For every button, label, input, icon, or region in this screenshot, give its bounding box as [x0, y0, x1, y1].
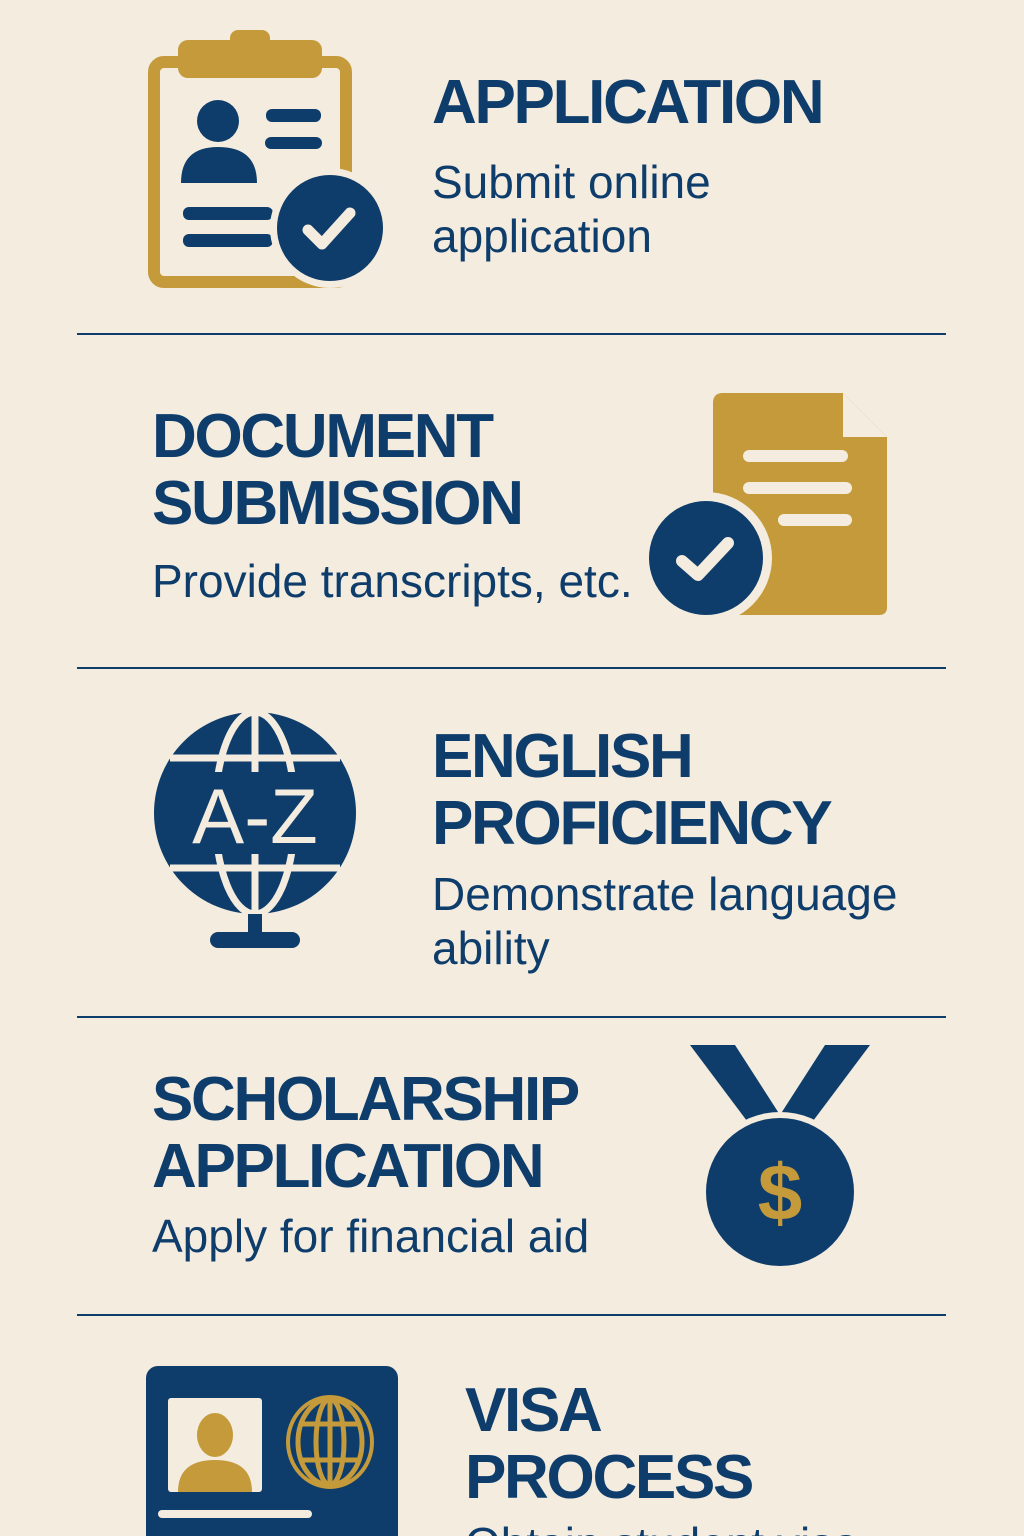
icon: globe A-Z: A-Z [192, 772, 318, 860]
title: scholarship application: SCHOLARSHIP [152, 1065, 578, 1134]
title: visa process: VISA [465, 1376, 601, 1445]
icon: visa card [146, 1366, 398, 1536]
text: document submission: Provide transcripts, etc. [152, 555, 633, 607]
text: scholarship application: Apply for financial aid [152, 1210, 589, 1262]
title: scholarship application [152, 1065, 578, 1201]
icon: globe A-Z [154, 712, 356, 948]
title: english proficiency: PROFICIENCY [432, 789, 830, 858]
text: application [432, 156, 711, 262]
text: english proficiency [432, 868, 897, 974]
text: english proficiency: Demonstrate language [432, 868, 897, 920]
title: scholarship application: APPLICATION [152, 1132, 542, 1201]
icon: clipboard application [148, 30, 383, 288]
title: document submission [152, 402, 522, 538]
title: english proficiency: ENGLISH [432, 722, 691, 791]
title: english proficiency [432, 722, 832, 858]
icon: medal with dollar: $ [758, 1148, 802, 1237]
text: application: application [432, 210, 652, 262]
text: application: Submit online [432, 156, 711, 208]
title: application: APPLICATION [432, 68, 822, 137]
icon: document with check [649, 393, 887, 615]
text: english proficiency: ability [432, 922, 550, 974]
title: document submission: SUBMISSION [152, 469, 522, 538]
title: visa process: PROCESS [465, 1443, 752, 1512]
title: document submission: DOCUMENT [152, 402, 492, 471]
icon: medal with dollar [690, 1045, 870, 1266]
title: visa process [465, 1376, 752, 1512]
